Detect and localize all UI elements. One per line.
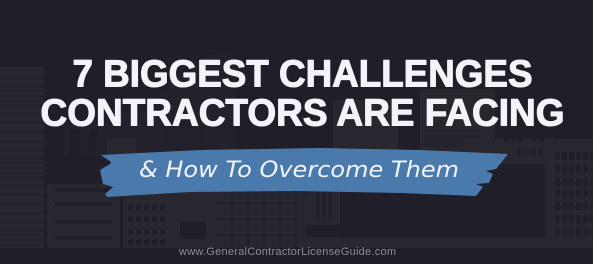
title line 1: 7 BIGGEST CHALLENGES	[72, 54, 532, 96]
brush stroke	[100, 148, 508, 197]
building: grid facade	[217, 165, 340, 248]
subtitle brush banner	[100, 148, 508, 197]
building: far right tower	[552, 139, 593, 248]
website url: www.GeneralContractorLicenseGuide.com	[178, 246, 396, 258]
building: window grid block	[123, 192, 170, 248]
city skyline backdrop	[0, 52, 593, 248]
building: central spire	[64, 52, 367, 182]
building: dark lot base	[340, 193, 553, 248]
building: mid-right tower	[333, 89, 495, 169]
title line 2: CONTRACTORS ARE FACING	[40, 92, 564, 134]
building: block with dark square	[170, 190, 217, 248]
subtitle text: & How To Overcome Them	[139, 158, 459, 183]
building: right block with windows	[464, 138, 555, 248]
title	[40, 54, 564, 134]
building: far left striped tower	[0, 67, 44, 248]
building: lower left striped block	[47, 184, 120, 248]
